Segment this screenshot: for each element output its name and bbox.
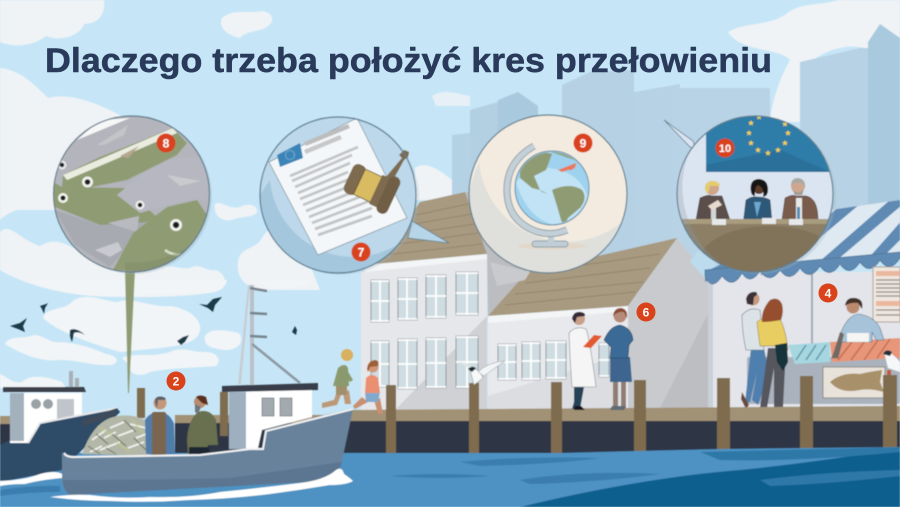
fisherman left bbox=[145, 396, 175, 455]
runner orange bbox=[353, 360, 383, 414]
building 2 bbox=[488, 238, 710, 410]
callout 7: EU law bbox=[260, 117, 449, 275]
badge 6 bbox=[636, 302, 656, 322]
building 1 bbox=[361, 192, 540, 410]
badge 8: 8 bbox=[163, 136, 170, 150]
speaker middle bbox=[743, 179, 772, 225]
speaker left bbox=[696, 181, 730, 220]
badge 2: 2 bbox=[173, 374, 180, 388]
badge 9 bbox=[574, 134, 592, 152]
badge 4 bbox=[818, 284, 838, 302]
badge 8 bbox=[156, 134, 176, 152]
globe stand bbox=[507, 146, 568, 247]
badge 6: 6 bbox=[643, 306, 650, 320]
globe sphere bbox=[515, 150, 590, 226]
businesswoman bbox=[604, 308, 633, 410]
birds bbox=[10, 297, 297, 345]
water bbox=[0, 447, 900, 507]
fish pile bbox=[82, 415, 150, 456]
poster bbox=[873, 267, 900, 322]
skyline bbox=[452, 24, 900, 280]
awning bbox=[690, 200, 900, 284]
left boat bbox=[0, 371, 120, 482]
badge 7: 7 bbox=[358, 246, 365, 260]
callout 8: overfished fish bbox=[50, 115, 220, 393]
gull on post bbox=[458, 361, 505, 385]
counter with fish bbox=[747, 338, 900, 404]
main boat bbox=[62, 285, 353, 495]
scientist bbox=[569, 312, 602, 410]
badge 10: 10 bbox=[719, 143, 731, 155]
callout 10: EU officials bbox=[664, 114, 836, 274]
badge 7 bbox=[352, 242, 370, 262]
gavel bbox=[340, 150, 409, 216]
couple bbox=[741, 292, 788, 409]
callout 9: globe bbox=[469, 115, 627, 286]
wake main bbox=[50, 469, 353, 502]
market stall bbox=[690, 200, 900, 410]
title: Dlaczego trzeba położyć kres przełowieniu bbox=[45, 42, 772, 80]
badge 9: 9 bbox=[580, 136, 587, 150]
badge 10 bbox=[716, 138, 734, 158]
clouds bbox=[0, 0, 900, 388]
windows building 2 bbox=[498, 341, 609, 380]
speaker right bbox=[782, 178, 818, 220]
gull right bbox=[883, 350, 900, 376]
badge 2 bbox=[166, 372, 186, 390]
posts bbox=[137, 375, 897, 453]
pier bbox=[0, 406, 900, 453]
badge 4: 4 bbox=[825, 286, 832, 300]
vendor bbox=[832, 298, 884, 358]
windows building 1 bbox=[371, 272, 478, 389]
wake left bbox=[0, 472, 62, 486]
fisherman right bbox=[187, 396, 218, 456]
runner green bbox=[322, 349, 353, 408]
